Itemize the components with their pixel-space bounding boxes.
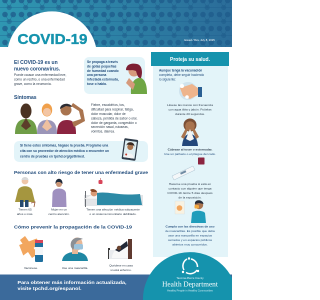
intro text block: nuevo coronavirus. — [14, 66, 61, 72]
panel: get tested callout: cita con su proveedor de atención médica o encuentre un — [20, 149, 109, 153]
prevention labels: Quédese en casa — [109, 264, 133, 268]
heading: symptoms: Síntomas — [14, 95, 37, 101]
icon: phone with doctor — [122, 138, 138, 161]
icon: vaccine and bandage — [18, 236, 43, 262]
panel: how it spreads: una persona — [87, 73, 107, 77]
handwashing text — [167, 103, 213, 116]
icon: older man — [15, 177, 35, 207]
intro text: lo siguiente: — [159, 78, 176, 82]
icon: three people with symptoms — [15, 103, 85, 134]
symptoms list: secreción nasal, náuseas, — [91, 125, 129, 129]
risk labels: Tienen 65 — [18, 208, 32, 212]
intro text: completa, debe seguir haciendo — [159, 73, 204, 77]
mask guidance text: abiertos muy concurridos. — [172, 242, 208, 246]
risk labels: centro atención. — [48, 212, 70, 216]
prevention labels: Use una mascarilla. — [62, 266, 88, 270]
person 1 — [15, 104, 37, 134]
cough text: Use un pañuelo o el pliegue del codo. — [164, 152, 216, 156]
heading: how to prevent: Cómo prevenir la propagación de la COVID-19 — [14, 224, 132, 230]
testing text: de la exposición. — [178, 196, 202, 200]
prevention labels — [24, 264, 133, 272]
mask guidance text — [165, 224, 215, 246]
icon: resting in bed at home — [108, 239, 132, 259]
panel: how it spreads: infectada estornuda, — [87, 78, 119, 82]
issue date: Issued / Rev. July 8, 2025 — [184, 38, 215, 42]
icon: woman coughing — [126, 64, 147, 94]
panel: how it spreads: Se propaga a través — [87, 60, 118, 64]
cough text — [164, 148, 216, 156]
panel header: Proteja su salud. — [170, 57, 211, 63]
mask guidance text: usar una mascarilla en espacios — [168, 234, 213, 238]
footer band: Para obtener más información actualizada, — [18, 280, 127, 286]
risk labels: Mujer en un — [51, 208, 67, 212]
icon: tissue box and test strip — [172, 158, 204, 180]
risk labels — [17, 208, 140, 216]
icon: person covering cough — [181, 118, 199, 146]
handwashing text: con agua tibia y jabón. Frótelas — [168, 108, 212, 112]
icon: pregnant woman — [52, 179, 66, 207]
testing text — [167, 182, 213, 200]
header banner — [0, 0, 232, 48]
symptoms list — [91, 103, 138, 134]
prevention labels: Vacúnese. — [24, 266, 38, 270]
handwashing text: Lávese las manos con frecuencia — [167, 103, 213, 107]
person 3 — [57, 103, 85, 134]
mask guidance text: cerrados y en espacios públicos — [168, 238, 212, 242]
panel: how it spreads: tose o habla. — [87, 82, 107, 86]
panel: how it spreads: de gotas pequeñas — [87, 64, 117, 68]
panel: get tested callout — [14, 138, 148, 162]
risk labels: años o más. — [17, 212, 33, 216]
person 2 — [37, 104, 57, 134]
icon: person wearing mask — [62, 238, 88, 261]
intro text block: El COVID-19 es un — [14, 60, 58, 66]
panel: get tested callout: centro de pruebas en tpchd.org/getlinked. — [20, 154, 85, 158]
prevention labels: si está enfermo. — [110, 268, 132, 272]
risk labels: o un sistema inmunitario debilitado. — [89, 212, 137, 216]
intro text block — [14, 60, 66, 86]
risk labels: Tienen una afección médica subyacente — [86, 208, 140, 212]
intro text block: grave, como la neumonía. — [14, 82, 52, 86]
panel: protect your health — [151, 52, 229, 257]
panel: how it spreads: de humedad cuando — [87, 69, 119, 73]
symptoms list: cabeza, pérdida de sabor o olor, — [91, 116, 138, 120]
health department logo: Health Department — [162, 280, 218, 288]
intro text: Aunque tenga la vacunación — [159, 68, 202, 72]
heading: high-risk people: Personas con alto riesgo de tener una enfermedad grave — [14, 170, 148, 176]
health department logo: Tacoma-Pierce County — [176, 276, 204, 280]
intro text block: como un resfrío, o una enfermedad — [14, 78, 65, 82]
icon: washing hands — [179, 82, 202, 100]
panel: how it spreads — [84, 57, 147, 94]
footer band: visite tpchd.org/espanol. — [18, 286, 82, 292]
mask guidance text: de mascarillas. Es posible que deba — [165, 229, 215, 233]
testing text: contacto con alguien que tenga — [168, 186, 212, 190]
testing text: COVID-19. Entre 5 días después — [167, 191, 213, 195]
icon: patient in bed — [84, 178, 143, 207]
intro text block: Puede causar una enfermedad leve, — [14, 73, 66, 77]
mask guidance text: Cumpla con las directivas de uso — [166, 224, 215, 228]
panel header — [151, 52, 229, 66]
symptoms list: dificultad para respirar, fatiga, — [91, 108, 134, 112]
symptoms list: dolor muscular, dolor de — [91, 112, 126, 116]
testing text: Hacerse una prueba si está en — [169, 182, 211, 186]
footer band — [0, 274, 232, 300]
cough text: Cúbrase al toser o estornudar. — [168, 148, 212, 152]
icon: masked person with guidance sheet — [175, 200, 206, 223]
title: COVID-19 — [18, 32, 88, 48]
panel: get tested callout: Si tiene estos síntomas, hágase la prueba. Programe una — [20, 144, 108, 148]
health department logo: Healthy People in Healthy Communities — [167, 288, 214, 292]
symptoms list: vómitos, diarrea. — [91, 130, 115, 134]
symptoms list: dolor de garganta, congestión o — [91, 121, 137, 125]
health department logo — [143, 252, 232, 300]
icon: logo mark — [182, 257, 199, 274]
white circle behind title — [8, 11, 96, 47]
intro text — [159, 68, 204, 82]
symptoms list: Fiebre, escalofríos, tos, — [91, 103, 125, 107]
handwashing text: durante 20 segundos. — [175, 112, 205, 116]
